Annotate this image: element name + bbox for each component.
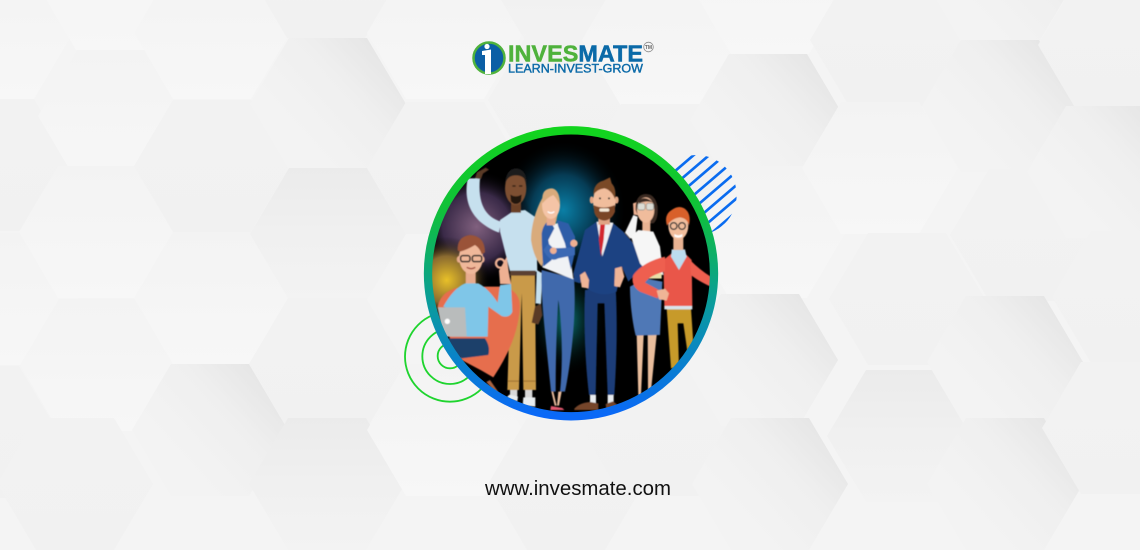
person: standing man waving — [467, 168, 542, 407]
portrait circle background — [432, 134, 710, 412]
person: seated man in armchair with laptop — [438, 235, 520, 393]
gradient ring — [428, 130, 714, 416]
person: bearded man in navy suit — [573, 177, 645, 410]
trademark — [644, 42, 653, 52]
logo — [474, 40, 653, 76]
person: red-haired man in red hoodie — [632, 207, 711, 368]
person: woman in white blouse and blue skirt — [625, 194, 663, 395]
blue striped circle — [675, 155, 737, 232]
people — [438, 168, 711, 410]
logo tagline: LEARN-INVEST-GROW — [508, 62, 644, 76]
logo icon — [474, 42, 504, 74]
trademark: TM — [645, 45, 652, 51]
logo name: INVESMATE — [508, 40, 643, 66]
website url: www.invesmate.com — [484, 478, 671, 500]
hero illustration — [403, 110, 747, 416]
person: woman with long blond hair — [531, 188, 578, 410]
concentric green circles — [405, 312, 495, 402]
